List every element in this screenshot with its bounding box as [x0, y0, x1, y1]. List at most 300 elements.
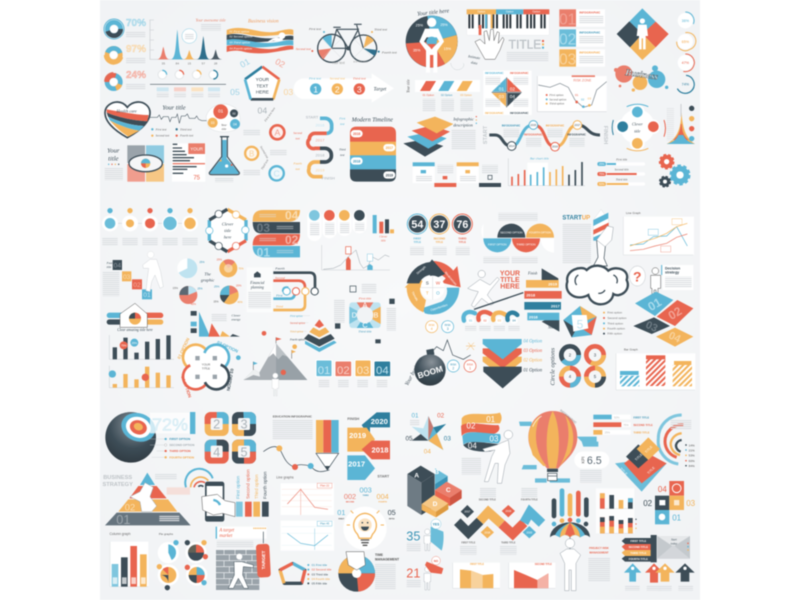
numbered ribbons: 03 [257, 221, 270, 235]
layered triangles: 02 Option [523, 359, 543, 364]
number badges: TITLE [414, 240, 421, 244]
section: middle-left infographics [102, 208, 396, 398]
numbered cards: 01 [559, 12, 576, 29]
A B C circles: Second text [259, 145, 270, 159]
ribbon timeline: Finish [527, 272, 538, 276]
cone chart [667, 104, 695, 144]
star: 03 [444, 436, 451, 443]
percent timeline [150, 70, 226, 98]
pentagon: 05 [230, 87, 240, 97]
four quadrant diamond: 03 [499, 94, 504, 99]
pentagon ring: 05 Fifth title [312, 581, 327, 585]
rounded squares 2 3 4 5 [205, 412, 256, 464]
serpentine path: text [340, 153, 345, 157]
A B C circles: Third text [260, 158, 269, 170]
nested arcs: 53% [689, 454, 695, 458]
pie graphs: 40% [237, 300, 243, 304]
body circle chart: data [471, 60, 478, 66]
pentagon ring: 03 Third title [312, 572, 328, 576]
SWOT circle: Opportunities [430, 303, 449, 312]
semicircle options: THIRD OPTION [516, 242, 536, 246]
serpentine path: 2017 [316, 137, 325, 142]
envelope with labels: FIRST TITLE [630, 539, 646, 543]
target arrow: 2 [335, 84, 340, 94]
wave ribbons [227, 20, 293, 53]
striped strip: 02 Option [441, 93, 453, 97]
risk zone chart: 01 [575, 93, 579, 97]
year arrows [347, 412, 390, 480]
barber pole rocket and cloud [567, 209, 628, 304]
person on plank and your title here: TITLE [500, 277, 520, 284]
worm steps [464, 312, 520, 331]
layered triangles: 04 Option [523, 340, 543, 345]
target arrow: 1 [313, 84, 318, 94]
four petal diagram: Clever [632, 121, 643, 126]
fist pie: TIME [375, 553, 384, 557]
pie graphs: 70% [238, 266, 244, 270]
target market: A target [218, 528, 235, 533]
risk zone chart: Second option [549, 97, 567, 101]
donut 24% [105, 73, 122, 91]
progress bars: First title [615, 157, 628, 161]
stat 21: NO [434, 559, 439, 563]
tube loop diagram: First [275, 294, 283, 298]
peak chart: 57 [202, 61, 205, 65]
four block grid: 04 [658, 485, 667, 494]
semicircle options: FOURTH OPTION [529, 230, 551, 234]
pentagon five options: Fifth option [607, 332, 622, 336]
number badges: TITLE [459, 240, 466, 244]
decision strategy: strategy [665, 271, 680, 275]
four block grid: 03 [686, 499, 696, 508]
mountain [236, 331, 307, 396]
pentagon ring [280, 563, 332, 585]
business splash [614, 65, 668, 92]
pill columns [307, 210, 367, 241]
idea bulb: 002 [344, 492, 356, 501]
number badges: 54 [411, 219, 423, 231]
pentagon ring: 04 Fourth title [312, 577, 330, 581]
progress bars [593, 415, 653, 435]
four petal diagram: title [634, 129, 641, 134]
peak chart: 28 [214, 61, 218, 65]
serpentine path: Second [293, 131, 302, 135]
bomb with risk fuse: RISK [445, 323, 451, 327]
layered pyramid: Fourth option [289, 339, 306, 342]
wavy timeline: START [483, 125, 489, 144]
star: 01 [411, 413, 419, 420]
house pills: Clear amazing title here [117, 328, 153, 332]
pie graphs: graphic [201, 278, 214, 283]
title block [507, 38, 548, 61]
wavy timeline: 2015 [530, 123, 537, 127]
pentagon ring: 02 Second title [312, 568, 332, 572]
wave ribbons: 02 Second option [229, 34, 253, 38]
star [405, 413, 451, 456]
monthly bar chart: Bar chart title [530, 156, 549, 160]
pentagon: TEXT [256, 83, 268, 88]
clover diagram: 02 OPTION [216, 340, 239, 354]
shirt arrows row [624, 563, 695, 591]
serpentine path: text [340, 122, 345, 126]
isometric blocks [407, 466, 462, 517]
pulling person [462, 430, 513, 483]
decision strategy: 04 [667, 330, 683, 346]
semicircle options: FIRST OPTION [488, 242, 507, 246]
body circle chart: Intimate [467, 54, 481, 60]
zigzag band: SECOND TITLE [479, 500, 496, 502]
serpentine path: Third [339, 148, 346, 152]
walking person [143, 251, 163, 292]
SWOT circle: Weaknesses [444, 271, 458, 287]
pentagon five options: 5 [577, 318, 584, 332]
brick wall with punching bag [216, 528, 271, 590]
orange bar chart [109, 366, 174, 388]
wavy timeline: 2016 [552, 145, 558, 149]
bomb with risk fuse: Your business [404, 356, 425, 387]
stat 21: 21 [406, 566, 420, 580]
idea bulb [337, 485, 396, 550]
decision strategy: 02 [666, 304, 685, 323]
title diamond: TITLE [644, 444, 654, 454]
clover diagram: 01 OPTION [176, 337, 190, 360]
four quadrant diamond: INFOGRAPHIC [510, 71, 529, 75]
idea bulb: FIFTH [389, 518, 395, 520]
wavy timeline: INFOGRAPHIC [524, 132, 543, 136]
numbered ribbons: 04 [285, 208, 299, 222]
clover diagram: 03 OPTION [226, 368, 235, 391]
ECG line and legend: Fourth text [179, 134, 194, 138]
vertical option bars: First option [235, 476, 240, 499]
financial planning [247, 267, 273, 312]
SWOT circle: W [436, 280, 441, 285]
line graphs: Plan 45 [320, 522, 330, 526]
A B C D square: B [374, 311, 379, 320]
star: 04 [424, 449, 431, 456]
number badges: TITLE [436, 240, 443, 244]
tube loop diagram [273, 267, 318, 310]
body circle chart [406, 8, 481, 73]
bomb with risk fuse: 1 [469, 367, 471, 371]
modern timeline: 2019 [386, 173, 393, 177]
dark bar chart: 75% [121, 344, 127, 348]
layered triangles [483, 339, 543, 388]
pie graphs: The [204, 271, 211, 276]
modern timeline: 2017 [386, 146, 393, 150]
peak chart: 84 [176, 61, 179, 65]
peak chart: 15 [188, 61, 191, 65]
hatched bar graph [616, 348, 695, 390]
numbered tiles [316, 360, 391, 387]
worm steps: 03 [498, 319, 501, 323]
idea bulb: FIRST [338, 518, 345, 520]
project risk text: PROJECT RISK [589, 546, 609, 550]
numbered ribbons [253, 208, 300, 260]
isometric blocks: B [434, 469, 439, 476]
horizontal bar chart [172, 143, 205, 182]
decision strategy: ? [633, 269, 642, 285]
SWOT circle: O [436, 290, 440, 295]
A B C circles: C [274, 168, 280, 178]
small column chart: Clever [379, 234, 388, 238]
fist pie: MANAGEMENT [375, 558, 399, 562]
modern timeline: 2016 [353, 132, 361, 136]
A B C circles [243, 106, 287, 182]
numbered tiles: 01 [318, 365, 330, 377]
line graphs: Line graphs [276, 476, 294, 480]
flask: title [222, 127, 227, 131]
rounded squares 2 3 4 5: 4 [213, 445, 220, 459]
numbered cards [559, 9, 605, 69]
zigzag band: FIRST TITLE [461, 542, 476, 544]
bicycle: Your text [332, 61, 345, 65]
option cards [413, 162, 501, 187]
umbrella person with pillars [550, 488, 590, 591]
pie graphs: 20% [236, 284, 242, 288]
flask: 04 [233, 122, 237, 126]
circle options: Circle options [549, 347, 556, 385]
numbered ribbon stack: 03 [490, 434, 499, 443]
staircase steps: 03 [123, 274, 131, 281]
envelope with labels: today [671, 542, 678, 546]
line graph [623, 211, 694, 255]
flask: 01 [218, 108, 224, 113]
wave ribbons: 04 Fourth option [229, 47, 252, 51]
zigzag band: THIRD TITLE [501, 542, 516, 544]
pie graphs row: Pie graphs [159, 532, 174, 536]
semicircle options [481, 213, 554, 263]
vertical option bars: Fourth option [263, 471, 268, 499]
heart: Health care [115, 109, 137, 114]
pentagon five options [563, 306, 627, 337]
modern timeline [350, 118, 396, 182]
stacked layers: description [453, 123, 473, 128]
body circle chart: 25% [440, 23, 448, 27]
nested arcs [658, 415, 695, 468]
nested arcs: 84% [689, 464, 695, 468]
ribbon timeline: 2016 [529, 314, 539, 319]
SWOT circle: T [426, 290, 429, 295]
brick wall with punching bag: TARGET [261, 550, 266, 569]
ECG line and legend: Third text [180, 127, 192, 131]
target market: market [219, 534, 233, 539]
area charts [453, 563, 555, 588]
target arrow [294, 73, 394, 103]
worm steps: 01 [469, 319, 473, 323]
stat 72%: 72% [152, 415, 188, 435]
stacked layers: Infographic [452, 117, 474, 122]
stat 35: 35 [406, 530, 420, 544]
target market [216, 527, 267, 547]
four quadrant diamond: INFOGRAPHIC [485, 71, 504, 75]
A B C D square: D [352, 311, 357, 320]
circle options: 5 [594, 374, 597, 379]
title diamond: TITLE [647, 465, 656, 475]
SWOT circle: Threats [411, 291, 419, 302]
wavy timeline: INFOGRAPHIC [567, 132, 586, 136]
progress bars: 50% [599, 182, 605, 186]
nested arcs: 60% [689, 459, 695, 463]
wave ribbons: Business vision [248, 20, 279, 25]
ECG line and legend: Your title [162, 105, 186, 112]
bicycle: Third text [374, 28, 387, 32]
peak chart: 35 [162, 61, 165, 65]
pentagon five options: First option [607, 311, 622, 315]
target arrow: Second text [330, 77, 345, 81]
flask: 02 [232, 112, 236, 116]
numbered tiles: 02 [337, 365, 350, 377]
stat 70%: 70% [126, 18, 146, 29]
business strategy pyramid [102, 473, 191, 527]
business splash: Business [624, 67, 659, 82]
striped strip: 01 Option [423, 93, 435, 97]
body circle chart: Your title here [417, 8, 450, 18]
serpentine path [293, 114, 346, 181]
risk zone chart: Third option [549, 102, 565, 106]
phone with hand [185, 469, 235, 522]
numbered cards: INFOGRAPHIC [579, 31, 601, 35]
wavy timeline [483, 121, 608, 151]
serpentine path: 2016 [316, 122, 325, 127]
wave ribbons: 03 Third option [229, 40, 250, 44]
chart title [196, 18, 226, 31]
serpentine path: FINISH [322, 176, 335, 181]
A B C D square [334, 283, 396, 343]
serpentine path: text [296, 167, 300, 171]
flask: Your [221, 123, 228, 127]
numbered ribbon stack [461, 413, 502, 452]
ribbon timeline [524, 268, 562, 332]
wavy timeline: INFOGRAPHIC [546, 124, 564, 128]
dark bar chart [109, 335, 174, 359]
A B C circles: First text here [263, 106, 277, 123]
spiky area chart: Clever [232, 314, 241, 318]
modern timeline: 2018 [353, 159, 361, 163]
peak chart [149, 20, 222, 65]
decision strategy [629, 265, 693, 347]
piano keyboard [467, 9, 549, 35]
four block grid [643, 481, 696, 524]
clover diagram: YOUR [202, 363, 211, 367]
numbered ribbons: 02 [285, 233, 299, 247]
tube loop diagram: Third [276, 304, 283, 308]
option list [150, 437, 194, 459]
A B C D square: C [362, 320, 368, 329]
idea bulb: 01 [337, 508, 345, 517]
A B C circles: B [249, 149, 254, 158]
ribbon timeline: 2018 [526, 293, 536, 298]
person on plank and your title here [468, 270, 523, 309]
year arrows: FINISH [347, 417, 360, 421]
decision strategy: Decision [665, 266, 680, 270]
pie graphs: 15% [213, 300, 219, 304]
section: bottom-right infographics [405, 408, 696, 591]
staircase steps: Fourth [106, 261, 115, 265]
title diamond: TITLE [634, 452, 644, 462]
A B C D square: First title [358, 296, 372, 300]
wavy timeline: 2014 [509, 144, 515, 148]
year arrows: START [377, 474, 390, 478]
progress bars: SECOND TITLE [633, 423, 653, 427]
chart title: Your awesome title [196, 18, 226, 23]
stat 21 [406, 556, 443, 590]
layered triangles: 01 Option [523, 369, 543, 374]
progress bars: FIRST TITLE [633, 415, 649, 419]
piano keyboard: Option [506, 10, 514, 14]
idea bulb: THIRD [363, 495, 369, 497]
progress bars: 25% [599, 162, 605, 166]
hexagon ring: here [224, 235, 232, 240]
four quadrant diamond [483, 71, 532, 115]
numbered ribbons: 01 [257, 246, 270, 260]
modern timeline: Modern Timeline [351, 118, 393, 124]
progress bars: THIRD TITLE [633, 431, 650, 435]
semicircle options: SECOND OPTION [500, 230, 523, 234]
A B C D square: Third title [358, 329, 372, 333]
bicycle: First text [308, 27, 321, 31]
small column chart [373, 215, 394, 242]
donut 70% [104, 19, 124, 39]
spiky area chart [191, 311, 241, 337]
area charts: SECOND TITLE [535, 564, 552, 566]
pie graphs: 15% [173, 286, 179, 290]
pie graphs row [157, 532, 208, 590]
circle options [549, 346, 604, 385]
hand outline [475, 29, 504, 59]
zigzag band: 2019 [505, 509, 512, 513]
stat 24% [126, 70, 146, 90]
envelope with labels [622, 535, 690, 562]
person diamond [617, 8, 669, 60]
KPI 6.5: 6.5 [587, 455, 602, 467]
small column chart: title [381, 238, 386, 242]
KPI 6.5 [574, 452, 609, 468]
project risk text [588, 546, 610, 581]
line graphs: Plan 22 [320, 484, 330, 488]
risk zone chart: 03 [588, 96, 591, 100]
vertical option bars [235, 469, 269, 517]
serpentine path: 2019 [316, 168, 325, 173]
striped strip: 03 Option [460, 93, 472, 97]
numbered cards: INFOGRAPHIC [579, 11, 601, 15]
eye photo block [105, 145, 164, 182]
hexagon ring [206, 209, 249, 252]
person on plank and your title here: YOUR [500, 270, 520, 277]
pentagon: 02 [273, 56, 287, 70]
staircase steps: 02 [133, 282, 141, 289]
monthly bar chart [508, 156, 585, 187]
pie graphs: 25% [217, 257, 223, 261]
wavy timeline: INFOGRAPHIC [502, 124, 520, 128]
zigzag band: 2017 [464, 510, 471, 514]
gears [660, 155, 689, 187]
ECG line and legend: Second text [156, 134, 170, 138]
KPI 6.5: KPI [580, 457, 585, 463]
startup title [562, 215, 591, 263]
progress bars: 25% [605, 431, 611, 435]
progress bars: Third title [616, 177, 628, 181]
ribbon timeline: 2017 [551, 304, 561, 309]
staircase steps: title [107, 265, 112, 269]
target arrow: 3 [357, 84, 362, 94]
option list: SECOND OPTION [169, 443, 194, 447]
piano keyboard: Option [532, 10, 541, 14]
rounded squares 2 3 4 5: 3 [240, 418, 248, 432]
zigzag band [457, 488, 542, 555]
progress bars: 75% [599, 172, 605, 176]
wavy timeline: FINISH [602, 126, 608, 144]
envelope with labels: THIRD TITLE [630, 551, 647, 555]
